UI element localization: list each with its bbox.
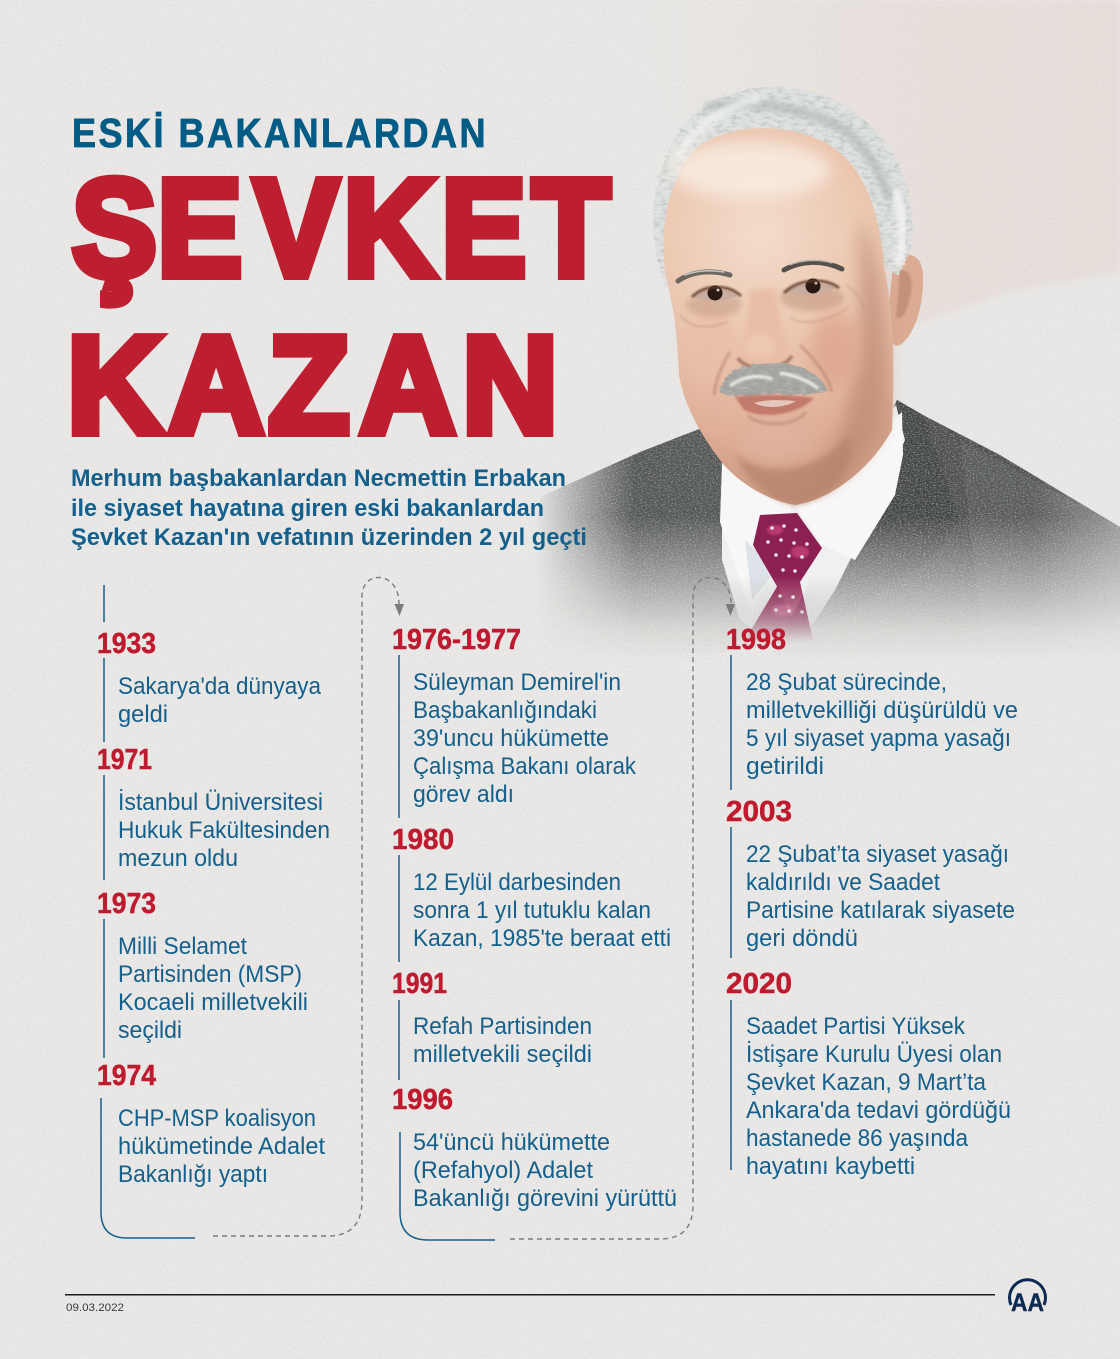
- column 2 timeline: [392, 624, 677, 1212]
- 1933 entry: 1933: [97, 628, 156, 660]
- 1996 entry: 54'üncü hükümette: [413, 1129, 610, 1156]
- 1974 entry: Bakanlığı yaptı: [118, 1161, 268, 1188]
- shirt and collar: [720, 405, 905, 628]
- 1998 entry: 28 Şubat sürecinde,: [746, 669, 947, 696]
- 2020 entry: Şevket Kazan, 9 Mart’ta: [746, 1069, 987, 1096]
- 1991 entry: 1991: [392, 968, 447, 1000]
- 1996 entry: 1996: [392, 1084, 453, 1116]
- 1974 entry: hükümetinde Adalet: [118, 1133, 325, 1160]
- 1971 entry: Hukuk Fakültesinden: [118, 817, 330, 844]
- icon: AA logo: AA: [1011, 1289, 1044, 1317]
- subtitle: ile siyaset hayatına giren eski bakanlardan: [71, 495, 544, 522]
- tie: [746, 513, 822, 640]
- 1996 entry: [392, 1084, 677, 1212]
- 1973 entry: Partisinden (MSP): [118, 961, 302, 988]
- 1991 entry: Refah Partisinden: [413, 1013, 592, 1040]
- 2020 entry: hastanede 86 yaşında: [746, 1125, 969, 1152]
- mouth: [735, 395, 814, 424]
- face: [664, 128, 893, 505]
- portrait photo of Şevket Kazan: [520, 87, 1120, 660]
- 1998 entry: getirildi: [746, 753, 824, 780]
- column 1 timeline: [97, 628, 330, 1188]
- 1991 entry: milletvekili seçildi: [413, 1041, 592, 1068]
- 1973 entry: 1973: [97, 888, 156, 920]
- subtitle: Merhum başbakanlardan Necmettin Erbakan: [71, 465, 566, 492]
- shirt and tie: [720, 405, 905, 660]
- 1998 entry: milletvekilliği düşürüldü ve: [746, 697, 1018, 724]
- 1996 entry: (Refahyol) Adalet: [413, 1157, 593, 1184]
- subtitle: Şevket Kazan'ın vefatının üzerinden 2 yıl geçti: [71, 524, 587, 551]
- 1971 entry: [97, 744, 330, 872]
- 1976-1977 entry: Süleyman Demirel'in: [413, 669, 621, 696]
- mustache: [720, 363, 828, 396]
- 1980 entry: 12 Eylül darbesinden: [413, 869, 621, 896]
- ear: [888, 255, 923, 346]
- 2003 entry: Partisine katılarak siyasete: [746, 897, 1015, 924]
- column 3 timeline: [726, 624, 1018, 1180]
- dashed arrow connector 2: [510, 577, 735, 1239]
- 2020 entry: 2020: [726, 968, 792, 1000]
- 1933 entry: Sakarya'da dünyaya: [118, 673, 322, 700]
- 1998 entry: [726, 624, 1018, 780]
- 2003 entry: 2003: [726, 796, 792, 828]
- 1971 entry: mezun oldu: [118, 845, 238, 872]
- 2003 entry: geri döndü: [746, 925, 858, 952]
- 1980 entry: Kazan, 1985'te beraat etti: [413, 925, 671, 952]
- 1976-1977 entry: 39'uncu hükümette: [413, 725, 609, 752]
- 1980 entry: sonra 1 yıl tutuklu kalan: [413, 897, 651, 924]
- 1976-1977 entry: Çalışma Bakanı olarak: [413, 753, 637, 780]
- 1971 entry: İstanbul Üniversitesi: [118, 789, 323, 816]
- name line: Kazan: KAZAN: [67, 308, 558, 462]
- 2020 entry: Ankara'da tedavi gördüğü: [746, 1097, 1011, 1124]
- 2020 entry: [726, 968, 1011, 1180]
- timeline connector lines: [101, 585, 731, 1240]
- hair: [653, 87, 913, 285]
- 1976-1977 entry: Başbakanlığındaki: [413, 697, 597, 724]
- name line: Şevket: ŞEVKET: [72, 152, 610, 306]
- subtitle: [71, 465, 587, 551]
- 1973 entry: [97, 888, 308, 1044]
- 1971 entry: 1971: [97, 744, 152, 776]
- icon: AA logo: [1010, 1280, 1046, 1317]
- 2003 entry: kaldırıldı ve Saadet: [746, 869, 940, 896]
- 1973 entry: Kocaeli milletvekili: [118, 989, 308, 1016]
- 1998 entry: 5 yıl siyaset yapma yasağı: [746, 725, 1011, 752]
- 1974 entry: 1974: [97, 1060, 156, 1092]
- suit jacket: [520, 400, 1120, 660]
- 1980 entry: [392, 824, 671, 952]
- heading line: Eski Bakanlardan: ESKİ BAKANLARDAN: [72, 111, 486, 157]
- 1980 entry: 1980: [392, 824, 454, 856]
- 2003 entry: 22 Şubat’ta siyaset yasağı: [746, 841, 1009, 868]
- face shading: [670, 142, 887, 505]
- 1973 entry: seçildi: [118, 1017, 182, 1044]
- 1974 entry: [97, 1060, 325, 1188]
- 1973 entry: Milli Selamet: [118, 933, 247, 960]
- 1933 entry: [97, 628, 322, 728]
- 1933 entry: geldi: [118, 701, 168, 728]
- 1974 entry: CHP-MSP koalisyon: [118, 1105, 316, 1132]
- title: [67, 111, 610, 462]
- 2003 entry: [726, 796, 1015, 952]
- 1976-1977 entry: görev aldı: [413, 781, 514, 808]
- 1998 entry: 1998: [726, 624, 786, 656]
- 1976-1977 entry: 1976-1977: [392, 624, 521, 656]
- 1996 entry: Bakanlığı görevini yürüttü: [413, 1185, 677, 1212]
- 1976-1977 entry: [392, 624, 637, 808]
- eyebrows: [678, 261, 842, 281]
- eyes: [692, 278, 839, 301]
- date: 09.03.2022: [66, 1302, 124, 1314]
- 2020 entry: İstişare Kurulu Üyesi olan: [746, 1041, 1002, 1068]
- 2020 entry: hayatını kaybetti: [746, 1153, 915, 1180]
- 2020 entry: Saadet Partisi Yüksek: [746, 1013, 966, 1040]
- footer rule: [65, 1294, 995, 1296]
- dashed arrow connector 1: [213, 577, 404, 1236]
- 1991 entry: [392, 968, 592, 1068]
